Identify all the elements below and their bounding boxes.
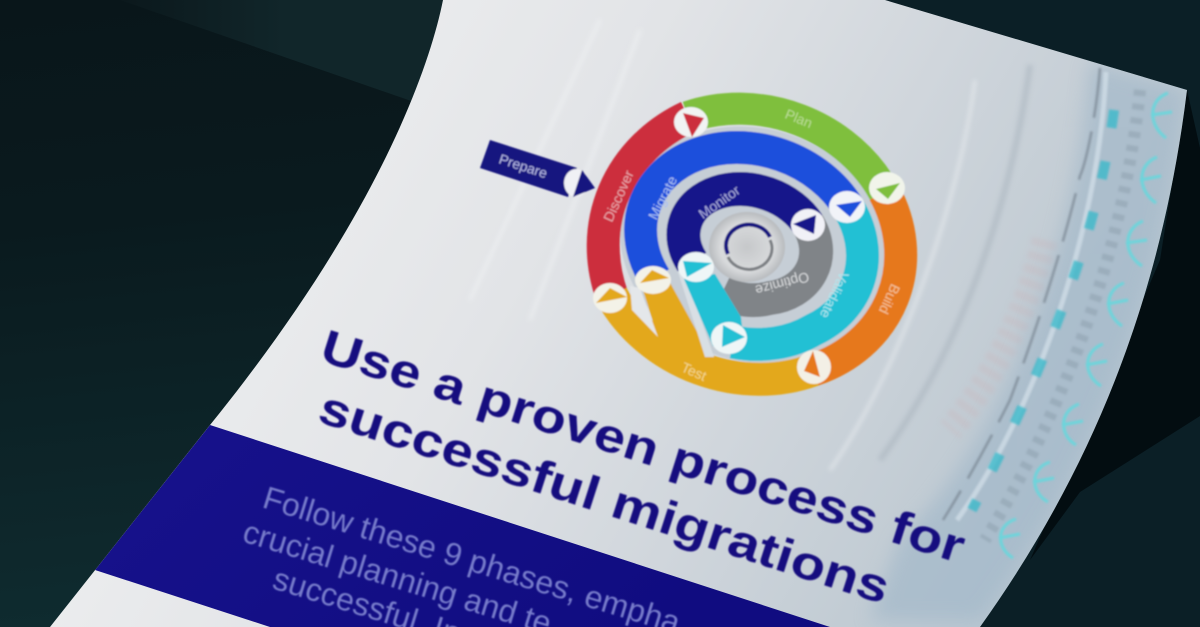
process wheel diagram — [480, 89, 921, 401]
ring: Test with inner wedge — [612, 279, 813, 379]
arrow: Prepare entry — [480, 140, 595, 197]
band: navy subtitle block — [95, 425, 830, 627]
title: Use a proven process for — [315, 319, 972, 573]
phase labels — [600, 106, 903, 384]
arrow: Prepare entry: Prepare — [497, 151, 550, 181]
title — [313, 319, 972, 614]
phase labels: Monitor — [695, 182, 743, 222]
ring: Monitor — [683, 189, 808, 262]
ring: Discover — [603, 117, 688, 296]
pale backing of wheel — [587, 89, 921, 401]
node: Monitor to Optimize — [791, 209, 825, 241]
node: Plan to Build — [869, 172, 905, 204]
phase nodes with arrows — [593, 107, 905, 384]
node: Discover to Plan — [674, 107, 708, 137]
ring: Optimize — [722, 224, 816, 300]
phase labels: Build — [876, 282, 903, 317]
phase labels: Validate — [817, 269, 852, 321]
phase labels: Plan — [783, 106, 815, 131]
ring: Migrate — [641, 147, 848, 278]
node: Test outer — [593, 283, 627, 313]
ring: Build — [813, 192, 901, 370]
paper cast shadow on right — [1030, 90, 1200, 560]
phase labels: Discover — [600, 168, 637, 224]
node: Validate inner — [711, 322, 747, 354]
inner teal strip — [684, 274, 745, 352]
node: Migrate to Validate — [829, 191, 865, 223]
phase labels: Migrate — [645, 173, 680, 222]
center hub — [709, 212, 785, 282]
phase labels: Test — [679, 359, 709, 384]
node: Monitor to Validate — [678, 252, 714, 282]
node: Build to Test — [797, 350, 831, 384]
phase labels: Optimize — [753, 269, 811, 299]
ring: Plan — [688, 109, 884, 192]
title: successful migrations — [313, 380, 896, 614]
node: Test inner — [635, 266, 671, 294]
panel: server rack strip at right edge — [870, 62, 1187, 620]
ring: Validate with inner strip — [678, 207, 863, 357]
